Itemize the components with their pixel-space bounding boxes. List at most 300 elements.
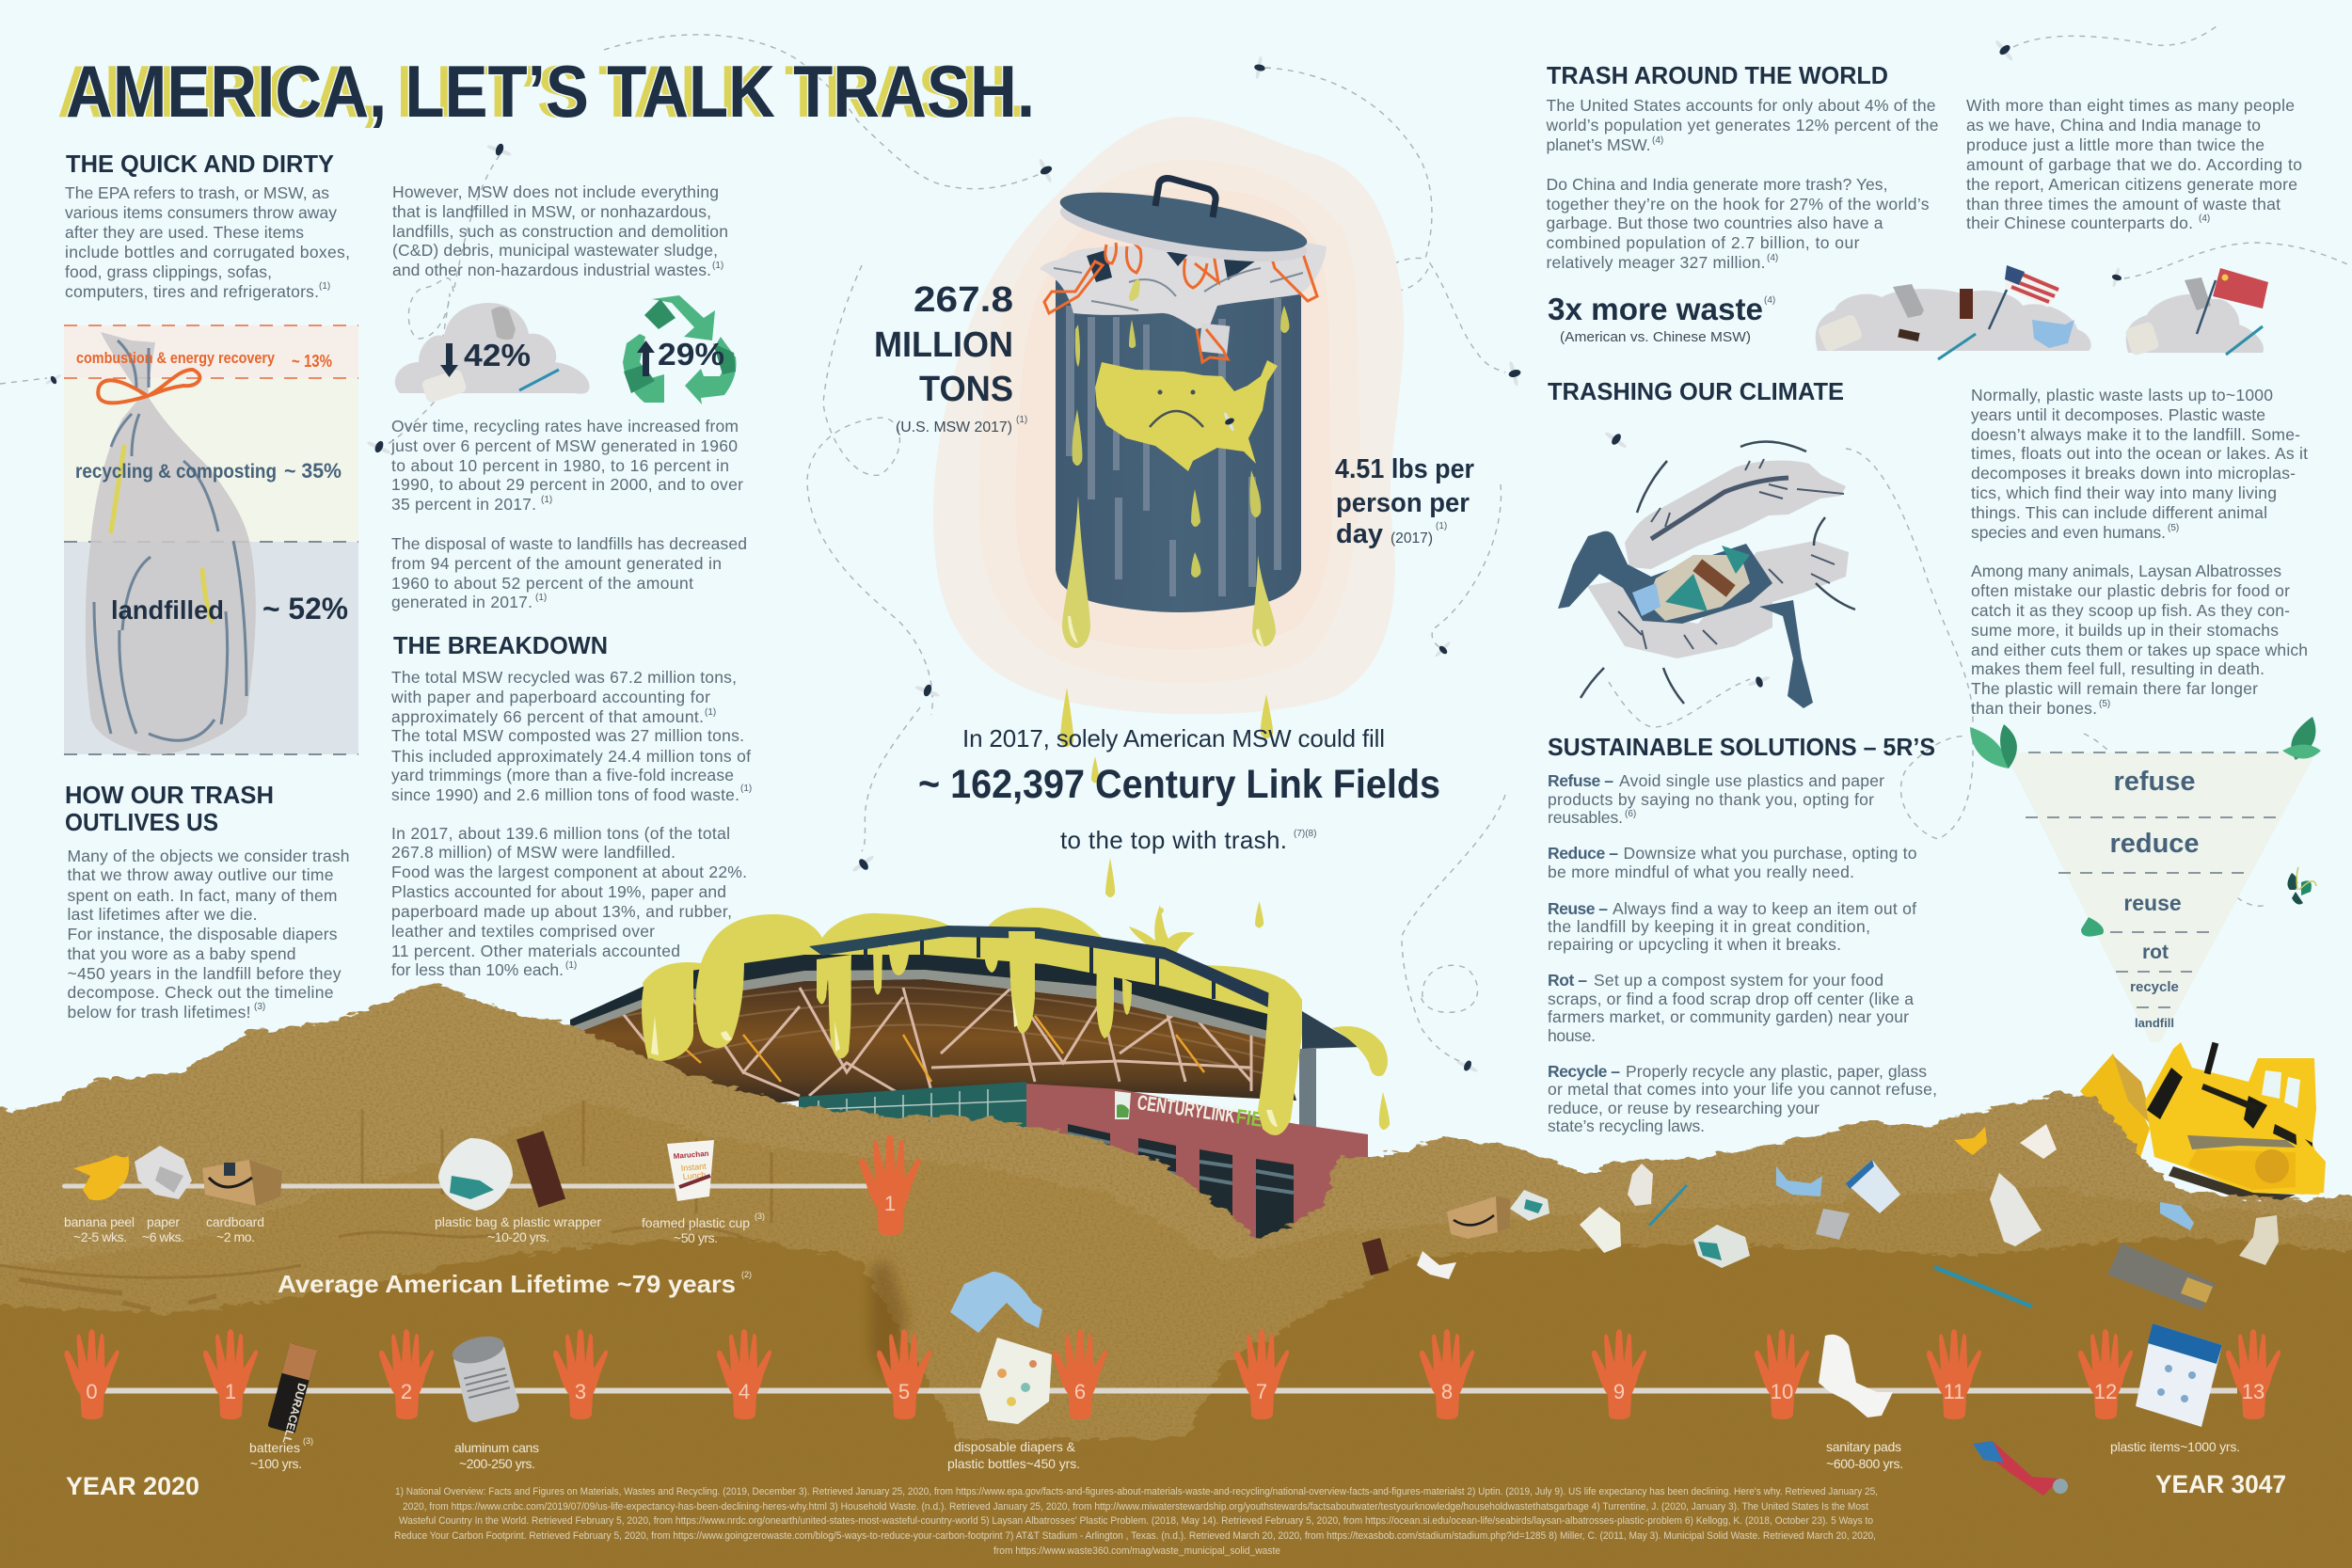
text block: Over time, recycling rates have increased from (391, 417, 739, 436)
stat: 3x more waste: (American vs. Chinese MSW) (1560, 329, 1751, 345)
panel: how our trash outlives us (65, 781, 350, 1022)
text block: years until it decomposes. Plastic waste (1971, 405, 2265, 424)
labels: (3) (303, 1436, 313, 1446)
text block: be more mindful of what you really need. (1548, 863, 1854, 881)
roof dark fascia (570, 955, 1279, 1034)
text block: decompose. Check out the timeline (68, 983, 333, 1002)
gray band (570, 970, 1279, 1042)
text block: column 2: With more than eight times as many people (1966, 96, 2295, 115)
stat: 267.8 million tons: TONS (919, 370, 1013, 409)
leg (1759, 600, 1813, 708)
icon: foamed cup: Lunch (682, 1170, 707, 1181)
icon: battery: DURACELL (280, 1382, 309, 1445)
icon: US waste cloud with flag (1816, 265, 2091, 359)
text block: approximately 66 percent of that amount. (391, 707, 704, 726)
timeline bottom: hands per century (64, 1329, 2280, 1419)
text block: Rot – (1548, 971, 1587, 990)
text block: below for trash lifetimes! (68, 1003, 250, 1022)
icon: tissue (1417, 1251, 1456, 1279)
icon: box (1447, 1196, 1510, 1239)
text block: 1990, to about 29 percent in 2000, and to over (391, 475, 743, 494)
spine and feather strokes (1651, 478, 1788, 539)
text block: In 2017, about 139.6 million tons (of the total (391, 824, 730, 843)
text block: column 2: the report, American citizens generate more (1966, 175, 2297, 194)
labels: ~200-250 yrs. (459, 1456, 535, 1471)
text block: Reuse – (1548, 899, 1608, 918)
stat: 4.51 lbs per person per day: (1) (1436, 521, 1447, 531)
label: landfilled (111, 592, 348, 626)
timeline bottom items (249, 1272, 2240, 1496)
text block: and other non-hazardous industrial wastes. (392, 261, 711, 279)
labels: ~2-5 wks. (73, 1229, 127, 1244)
icon: bottle (1776, 1166, 1822, 1196)
text block: reduce, or reuse by researching your (1548, 1099, 1820, 1117)
funnel: 5Rs (2005, 752, 2316, 1042)
text block: The total MSW composted was 27 million tons. (391, 726, 744, 745)
text block (390, 417, 747, 611)
text block: column 1: (4) (1652, 135, 1663, 146)
references: from https://www.waste360.com/mag/waste_municipal_solid_waste (993, 1545, 1280, 1557)
heading: TRASHING OUR CLIMATE (1548, 377, 1844, 405)
brick building (1026, 1084, 1368, 1256)
icon: toothpaste (1973, 1441, 2068, 1496)
text block: or metal that comes into your life you cannot refuse, (1548, 1080, 1937, 1099)
references: 2020, from https://www.cnbc.com/2019/07/09/us-life-expectancy-has-been-declining-heres-why.html 3) Household Waste. (n.d.). Retrieved January 25, 2020, from http://www.miwaterstewardship.org/youthstewards/factsaboutwater/testyourknowledge/householdwastethatsgarbage 4) Turrentine, J. (2020, January 3). The United States Is the Most (403, 1501, 1868, 1513)
timeline bottom: hands per century: 12 (2094, 1380, 2117, 1403)
bulldozer (2080, 1042, 2326, 1200)
timeline bottom: hands per century: 8 (1441, 1380, 1453, 1403)
label: combustion: combustion & energy recovery (76, 349, 275, 367)
label: year 3047: YEAR 3047 (2155, 1470, 2286, 1498)
funnel: 5Rs: reuse (2123, 891, 2182, 915)
text block: column 1: planet’s MSW. (1547, 135, 1650, 154)
text block: The disposal of waste to landfills has decreased (391, 534, 747, 553)
text block: that is landfilled in MSW, or nonhazardous, (392, 202, 711, 221)
text block: products by saying no thank you, opting for (1548, 790, 1874, 809)
text block (65, 183, 350, 301)
text block: and either cuts them or takes up space which (1971, 641, 2308, 659)
callout: Century Link Fields: (7)(8) (1294, 829, 1316, 839)
icon: foamed cup: Maruchan (673, 1149, 709, 1161)
icon: plastic pack (1846, 1160, 1900, 1213)
terrain: lower layer (0, 1235, 2352, 1568)
text block: tics, which find their way into many living (1971, 483, 2277, 502)
dark crease shadow (870, 1260, 908, 1383)
labels: banana peel (64, 1214, 135, 1229)
text block: column 1 (1545, 96, 1938, 272)
text block: for less than 10% each. (391, 960, 564, 979)
labels: ~2 mo. (216, 1229, 255, 1244)
funnel: 5Rs: reduce (2109, 829, 2200, 859)
text block: (5) (2168, 523, 2179, 533)
icon: plastic bottle (950, 1272, 1042, 1333)
text block: 35 percent in 2017. (391, 495, 536, 514)
labels: plastic items~1000 yrs. (2110, 1439, 2240, 1454)
goo drips on can (1062, 306, 1289, 648)
text block: 267.8 million) of MSW were landfilled. (391, 843, 675, 862)
icon: candy wrapper (1362, 1238, 1389, 1275)
panel: sustainable solutions (1548, 733, 1937, 1135)
icon: battery (264, 1343, 318, 1445)
references: Wasteful Country In the World. Retrieved February 5, 2020, from https://www.nrdc.org/onearth/united-states-most-wasteful-country-world 5) Laysan Albatrosses' Plastic Problem. (2018, May 14). Retrieved February 5, 2020, from https://ocean.si.edu/ocean-life/seabirds/laysan-albatrosses-plastic-problem 6) Kellogg, K. (2018, October 23). 5 Ways to (399, 1515, 1873, 1527)
text block: column 2: their Chinese counterparts do. (1966, 214, 2193, 232)
sign: FIE (1234, 1104, 1264, 1132)
text block: ~450 years in the landfill before they (68, 964, 342, 983)
labels: cardboard (206, 1214, 264, 1229)
labels: (3) (755, 1212, 765, 1221)
text block: last lifetimes after we die. (68, 905, 258, 924)
text block (392, 182, 728, 279)
map of USA with sad face (1095, 360, 1278, 471)
icon: plastic bag (438, 1138, 513, 1211)
text block: (1) (705, 707, 716, 718)
text block: (1) (712, 261, 723, 271)
timeline bottom: hands per century: 7 (1256, 1380, 1267, 1403)
timeline bottom: hands per century: 3 (575, 1380, 586, 1403)
blob behind trash can (933, 117, 1404, 714)
text block: to about 10 percent in 1980, to 16 percent in (391, 456, 729, 475)
slime drips over stadium (642, 931, 1388, 1135)
icon: plastic bag (1510, 1190, 1549, 1221)
upper wing (1625, 461, 1846, 569)
timeline bottom: hands per century: 4 (739, 1380, 750, 1403)
text block: decomposes it breaks down into microplas- (1971, 464, 2296, 483)
text block: The total MSW recycled was 67.2 million tons, (391, 668, 737, 687)
text block: column 1: (4) (1767, 253, 1778, 263)
labels: foamed plastic cup (642, 1215, 750, 1230)
lid (1057, 189, 1311, 274)
text block: food, grass clippings, sofas, (65, 262, 272, 281)
text block: paperboard made up about 13%, and rubber, (391, 902, 732, 921)
icon: foamed cup: Instant (680, 1162, 707, 1173)
hand: 100 years: 1 (884, 1192, 896, 1215)
text block: landfills, such as construction and demolition (392, 222, 728, 241)
terrain: back layer with torn edge (0, 980, 2352, 1568)
heading: average American lifetime: (2) (741, 1270, 752, 1279)
pylon (1302, 1011, 1362, 1049)
icon: plastic pack (2136, 1323, 2222, 1427)
text block: Reduce – (1548, 844, 1618, 863)
splash (1129, 905, 1195, 959)
icon: albatross with plastic in stomach (1558, 442, 1855, 708)
label: combustion: ~ 13% (292, 352, 332, 371)
text block: For instance, the disposable diapers (68, 925, 338, 943)
funnel: 5Rs: refuse (2113, 767, 2196, 797)
text block: 1960 to about 52 percent of the amount (391, 574, 693, 593)
glass band (799, 1082, 1026, 1129)
stat: 3x more waste: 3x more waste (1548, 292, 1763, 326)
text block: (1) (319, 281, 330, 292)
icon: keyboard (2107, 1243, 2216, 1310)
text block: Refuse – (1548, 771, 1613, 790)
text block (1971, 386, 2308, 718)
labels: disposable diapers & (954, 1439, 1076, 1454)
text block: doesn’t always make it to the landfill. Some- (1971, 425, 2300, 444)
stat: 267.8 million tons: (1) (1016, 415, 1027, 425)
stat: 3x more waste (1548, 292, 1775, 345)
text block: generated in 2017. (391, 593, 532, 611)
heading: HOW OUR TRASH (65, 781, 274, 809)
text block: column 1: The United States accounts for only about 4% of the (1547, 96, 1936, 115)
heading: THE QUICK AND DIRTY (66, 150, 334, 178)
labels: plastic bag & plastic wrapper (435, 1214, 601, 1229)
text block: that we throw away outlive our time (68, 865, 333, 884)
text block: computers, tires and refrigerators. (65, 282, 319, 301)
timeline bottom: hands per century: 11 (1944, 1380, 1964, 1403)
text block: include bottles and corrugated boxes, (65, 243, 350, 261)
icon: cup (2020, 1124, 2057, 1159)
text block: yard trimmings (more than a five-fold increase (391, 766, 734, 784)
text block (68, 847, 350, 1022)
funnel: 5Rs: landfill (2135, 1016, 2174, 1030)
text block: Set up a compost system for your food (1594, 971, 1883, 990)
stadium (570, 905, 1388, 1256)
sign: CENTURYLINK (1136, 1090, 1237, 1128)
icon: diaper (979, 1338, 1052, 1424)
icon: toothbrush (1649, 1185, 1687, 1226)
text block: (6) (1625, 809, 1636, 819)
body (1558, 531, 1772, 624)
labels: ~50 yrs. (674, 1230, 718, 1245)
icon: leaves left (1970, 724, 2017, 768)
heading: TRASH AROUND THE WORLD (1547, 61, 1888, 89)
timeline bottom: hands per century: 13 (2242, 1380, 2265, 1403)
stat: 4.51 lbs per person per day: 4.51 lbs per (1335, 454, 1474, 484)
text block: farmers market, or community garden) near your (1548, 1007, 1909, 1026)
text block: column 1: garbage. But those two countries also have a (1547, 214, 1883, 232)
text block: than their bones. (1971, 699, 2097, 718)
text block (1548, 771, 1937, 1135)
text block: Among many animals, Laysan Albatrosses (1971, 562, 2281, 580)
text block: column 2: (4) (2199, 214, 2210, 224)
labels: ~100 yrs. (250, 1456, 302, 1471)
icon: crumpled paper (135, 1146, 192, 1199)
text block: Plastics accounted for about 19%, paper and (391, 882, 726, 901)
terrain: creases (0, 1101, 771, 1309)
funnel: 5Rs: recycle (2130, 979, 2179, 995)
text block: since 1990) and 2.6 million tons of food waste. (391, 785, 739, 804)
icon: banana (1954, 1127, 1987, 1155)
icon: aluminum can (450, 1332, 520, 1424)
icon: recycling symbol, 29% (623, 295, 736, 404)
text block: (1) (565, 960, 577, 971)
scattered trash on landfill (1362, 1124, 2279, 1310)
text block: column 2: than three times the amount of waste that (1966, 195, 2280, 214)
text block: from 94 percent of the amount generated in (391, 554, 722, 573)
label: recycling: ~ 35% (284, 459, 342, 483)
label: landfilled: landfilled (111, 595, 224, 625)
title: AMERICA, LET’S TALK TRASH. (57, 50, 1026, 133)
text block: species and even humans. (1971, 523, 2166, 542)
icon: trash bag (86, 332, 256, 754)
terrain: mid layer (0, 1101, 2352, 1568)
callout: Century Link Fields: to the top with trash. (1060, 826, 1287, 854)
icon: clamshell (2239, 1215, 2279, 1265)
text block: Downsize what you purchase, opting to (1624, 844, 1917, 863)
icon: diaper (1580, 1207, 1621, 1253)
seating tiers (602, 987, 1291, 1080)
references: 1) National Overview: Facts and Figures on Materials, Wastes and Recycling. (2019, December 3). Retrieved January 25, 2020, from https://www.epa.gov/facts-and-figures-about-materials-waste-and-recycling/national-overview-facts-and-figures-materialst 2) Uptin. (2019, July 9). US life expectancy has been declining. Here's why. Retrieved January 25, (395, 1486, 1878, 1497)
text block: column 2: as we have, China and India manage to (1966, 116, 2261, 135)
callout: Century Link Fields: ~ 162,397 Century Link Fields (918, 762, 1440, 807)
text block: Normally, plastic waste lasts up to~1000 (1971, 386, 2273, 404)
panel: MSW exclusions and rates (390, 182, 747, 611)
panel: the breakdown (390, 631, 752, 979)
track (2187, 1135, 2296, 1149)
blade (2080, 1053, 2150, 1166)
text block: column 1: world’s population yet generates 12% percent of the (1545, 116, 1938, 135)
labels: ~10-20 yrs. (487, 1229, 549, 1244)
icon: jug (1628, 1164, 1653, 1206)
icon: bottle small (2160, 1202, 2194, 1230)
text block: (1) (535, 593, 547, 603)
text block: column 2 (1966, 96, 2302, 232)
timeline bottom: hands per century: 1 (225, 1380, 236, 1403)
text block: (1) (740, 784, 752, 794)
text block: things. This can include different animal (1971, 503, 2267, 522)
text block: However, MSW does not include everything (392, 182, 719, 201)
stat: 267.8 million tons (874, 280, 1027, 436)
body (2145, 1042, 2324, 1195)
heading: SUSTAINABLE SOLUTIONS – 5R’S (1548, 733, 1935, 761)
icon: foamed cup (667, 1140, 714, 1201)
icon: leaves right (2282, 717, 2321, 760)
icon: banana peel (73, 1149, 129, 1200)
text block: column 2: produce just a little more than twice the (1966, 135, 2265, 154)
stat: 4.51 lbs per person per day (1335, 454, 1474, 549)
timeline bottom: hands per century: 0 (86, 1380, 98, 1403)
stat: 4.51 lbs per person per day: day (1336, 519, 1383, 549)
labels: sanitary pads (1826, 1439, 1901, 1454)
icon: plastic bag large (1693, 1225, 1750, 1268)
references: Reduce Your Carbon Footprint. Retrieved February 5, 2020, from https://www.goingzerowaste.com/blog/5-ways-to-reduce-your-carbon-footprint 7) AT&T Stadium - Arlington , Texas. (n.d.). Retrieved March 20, 2020, from https://texasbob.com/stadium/stadium.php?id=1285 8) Miller, C. (2011, May 3). Municipal Solid Waste. Retrieved March 20, 2020, (394, 1530, 1876, 1542)
text block: Properly recycle any plastic, paper, glass (1626, 1062, 1927, 1081)
icon: candy wrapper (516, 1131, 565, 1208)
panel: trashing our climate (1548, 377, 2308, 718)
timeline bottom: hands per century: 10 (1771, 1380, 1793, 1403)
text block: 11 percent. Other materials accounted (391, 942, 680, 960)
icon: butterfly (2287, 867, 2316, 905)
text block: catch it as they scoop up fish. As they con- (1971, 601, 2290, 620)
heading: THE BREAKDOWN (393, 631, 608, 659)
text block: just over 6 percent of MSW generated in 1960 (390, 436, 738, 455)
hand: 100 years (860, 1134, 920, 1236)
icon: US flag (2005, 265, 2060, 308)
icon: cloud of waste, 42%: 42% (464, 338, 531, 372)
text block: repairing or upcycling it when it breaks. (1548, 935, 1841, 954)
timeline bottom: hands per century: 9 (1613, 1380, 1625, 1403)
icon: sanitary pad (1819, 1335, 1893, 1418)
timeline bottom: hands per century: 2 (401, 1380, 412, 1403)
text block: sume more, it builds up in their stomachs (1971, 621, 2279, 640)
flies (44, 36, 2124, 1075)
text block: Food was the largest component at about 22%. (391, 863, 747, 881)
stomach (1632, 546, 1750, 621)
label: recycling: recycling & composting (75, 461, 277, 483)
can body (1056, 280, 1301, 612)
text block: spent on eath. In fact, many of them (68, 886, 337, 905)
callout: Century Link Fields (918, 724, 1440, 854)
label: landfilled: ~ 52% (262, 592, 348, 626)
heading: OUTLIVES US (65, 808, 218, 836)
roof posts (866, 927, 1214, 999)
stat: 267.8 million tons: 267.8 (914, 280, 1013, 320)
text block: state’s recycling laws. (1548, 1117, 1705, 1135)
stat: 267.8 million tons: MILLION (874, 325, 1013, 365)
heading (65, 781, 274, 836)
labels: ~6 wks. (142, 1229, 184, 1244)
timeline bottom: hands per century: 6 (1074, 1380, 1086, 1403)
fly trails (0, 24, 2352, 1063)
text block: times, floats out into the ocean or lakes. As it (1971, 444, 2308, 463)
text block: (1) (541, 495, 552, 505)
text block: with paper and paperboard accounting for (390, 688, 710, 706)
text block: that you wore as a baby spend (68, 944, 295, 963)
icon: toothbrush (1934, 1267, 2032, 1307)
text block: column 1: relatively meager 327 million. (1547, 253, 1765, 272)
text block: This included approximately 24.4 million tons of (391, 747, 751, 766)
text block: various items consumers throw away (65, 203, 337, 222)
text block: The EPA refers to trash, or MSW, as (65, 183, 329, 202)
text block: Avoid single use plastics and paper (1619, 771, 1884, 790)
labels (64, 1212, 765, 1245)
text block: column 1: combined population of 2.7 billion, to our (1547, 233, 1860, 252)
falling goo drops (1060, 688, 1390, 1130)
stat: 4.51 lbs per person per day: person per (1336, 488, 1470, 518)
text block (390, 668, 752, 979)
text block: after they are used. These items (65, 223, 304, 242)
references (394, 1486, 1878, 1557)
text block: Many of the objects we consider trash (68, 847, 350, 865)
callout: Century Link Fields: In 2017, solely American MSW could fill (962, 724, 1385, 752)
labels: paper (147, 1214, 180, 1229)
text block: column 2: amount of garbage that we do. According to (1966, 155, 2302, 174)
text block: The plastic will remain there far longer (1971, 679, 2258, 698)
icon: China waste cloud with flag (2124, 268, 2268, 356)
icon: cloud of waste, 42% (395, 303, 590, 404)
text block: (5) (2099, 699, 2110, 709)
loose feathers (1581, 442, 1855, 704)
seating under roof (570, 979, 1296, 1110)
text block: (3) (254, 1002, 265, 1012)
title: AMERICA, LET’S TALK TRASH. (66, 50, 1035, 133)
icon: trash can with America (1040, 179, 1327, 648)
icon: can (1816, 1209, 1850, 1240)
panel: trash around the world (1545, 61, 2302, 359)
label: year 2020: YEAR 2020 (66, 1472, 199, 1500)
stat: 267.8 million tons: (U.S. MSW 2017) (896, 420, 1012, 436)
timeline bottom: hands per century: 5 (898, 1380, 910, 1403)
text block: often mistake our plastic debris for food or (1971, 581, 2290, 600)
labels: batteries (249, 1440, 300, 1455)
timeline top: items under one lifetime (64, 1131, 920, 1245)
text block: leather and textiles comprised over (391, 922, 655, 941)
text block: Recycle – (1548, 1062, 1620, 1081)
timeline lines (62, 1183, 2237, 1394)
text block: reusables. (1548, 808, 1623, 827)
icon: large jug (1990, 1173, 2042, 1246)
labels (249, 1436, 2240, 1471)
labels: aluminum cans (454, 1440, 539, 1455)
funnel: 5Rs: rot (2142, 942, 2169, 963)
trash bags (1040, 243, 1327, 329)
labels: plastic bottles~450 yrs. (947, 1456, 1080, 1471)
text block: column 1: together they’re on the hook for 27% of the world’s (1547, 195, 1930, 214)
roof arch (809, 926, 1287, 1023)
slime behind roof (643, 908, 1302, 1053)
text block: scraps, or find a food scrap drop off center (like a (1548, 990, 1914, 1008)
text block: makes them feel full, resulting in death. (1971, 659, 2265, 678)
